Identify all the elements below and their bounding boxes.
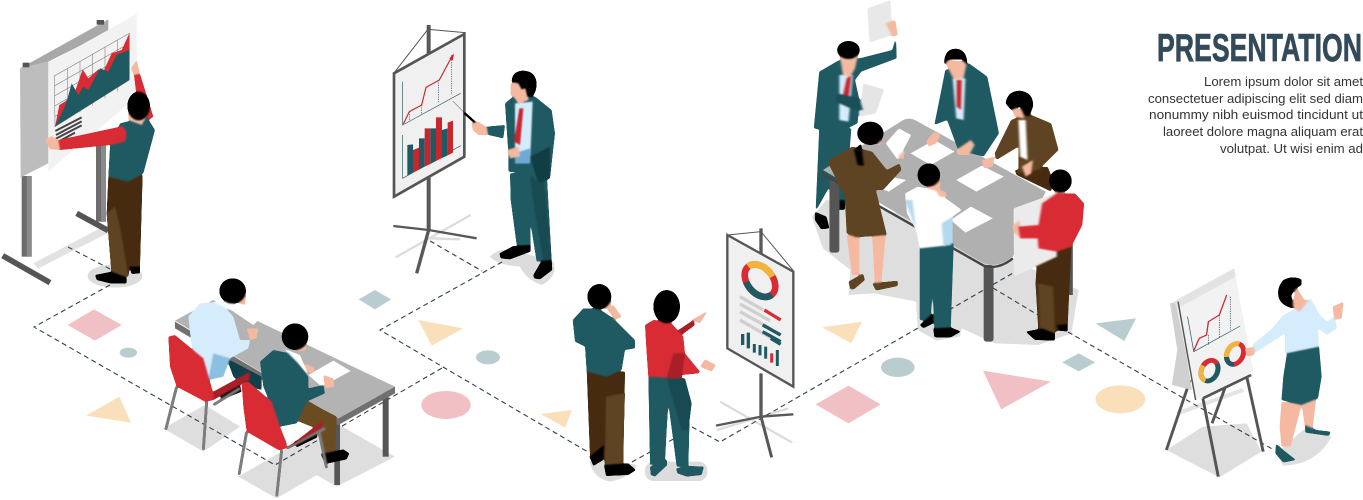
board stand — [3, 19, 108, 283]
scene: two people viewing the donut board — [573, 228, 793, 477]
chart paper — [48, 14, 137, 172]
body text: volutpat. Ut wisi enim ad — [1220, 141, 1363, 156]
dashed connector path — [34, 241, 1274, 465]
scene: woman at easel — [1166, 268, 1344, 477]
body text: consectetuer adipiscing elit sed diam — [1148, 91, 1363, 106]
man leaning over table — [926, 49, 999, 157]
body text: nonummy nibh euismod tincidunt ut — [1149, 107, 1363, 122]
person pinning chart — [45, 60, 155, 283]
person in light blue shirt on chair — [166, 278, 262, 450]
woman presenting — [1245, 277, 1344, 463]
scene: meeting around table — [814, 0, 1084, 342]
man in red holding board — [1012, 169, 1084, 341]
pointer — [453, 101, 465, 113]
chart stand — [393, 25, 477, 273]
man raising paper — [814, 0, 898, 229]
woman pointing — [645, 290, 716, 477]
easel — [1166, 268, 1263, 477]
body text: laoreet dolore magna aliquam erat — [1163, 124, 1363, 139]
scene: two people at desk — [166, 278, 395, 497]
chart board — [394, 34, 464, 197]
floor shapes and shadows — [33, 200, 1332, 498]
body text: Lorem ipsum dolor sit amet — [1204, 74, 1363, 89]
body text — [1148, 74, 1363, 156]
desk — [175, 300, 395, 485]
man in teal suit — [464, 71, 555, 279]
meeting table — [823, 119, 1073, 342]
woman in brown jacket — [982, 91, 1059, 192]
man in white shirt — [905, 163, 962, 337]
scene: presenter with pointer at flip chart — [393, 25, 555, 279]
man thinking — [573, 284, 636, 476]
donut chart board — [716, 228, 793, 457]
person in teal sweater on chair — [239, 323, 349, 497]
scene: presenter pinning chart on board — [3, 14, 155, 283]
woman in brown dress — [828, 122, 911, 291]
